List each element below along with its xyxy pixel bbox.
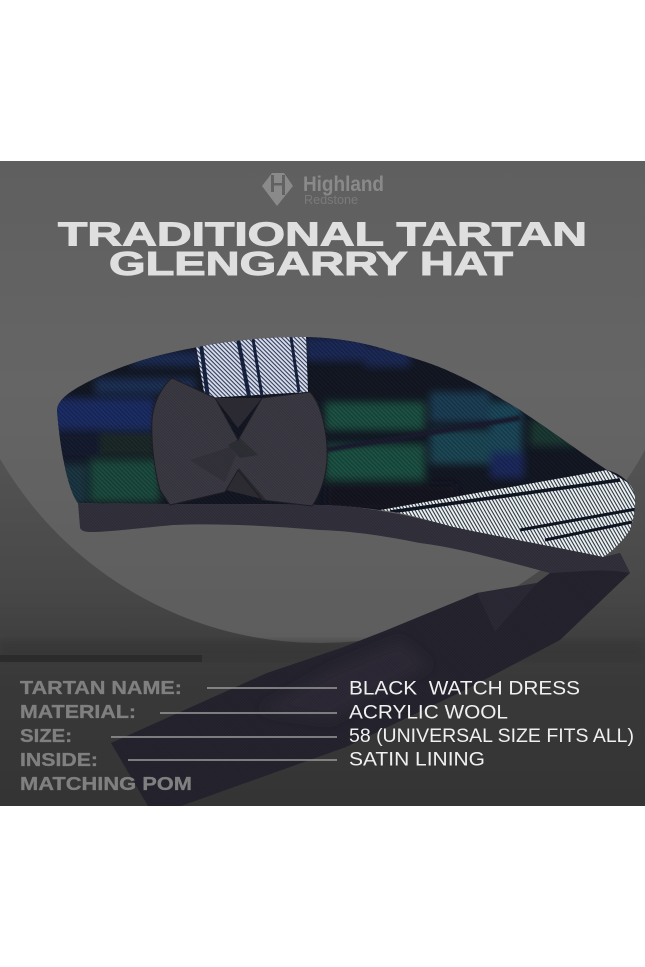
white stripe right <box>380 470 640 560</box>
hat crown tartan <box>57 337 636 557</box>
spec values <box>349 678 634 770</box>
connector lines <box>111 688 337 760</box>
panel: grey background <box>0 161 645 806</box>
hat band <box>78 503 630 573</box>
spec labels <box>20 677 192 794</box>
bow <box>152 378 327 506</box>
spec values: SATIN LINING <box>349 750 485 770</box>
logo: Highland Redstone: Highland <box>303 173 384 196</box>
spec labels: SIZE: <box>20 725 72 746</box>
title <box>58 222 584 276</box>
spec labels: MATCHING POM <box>20 773 192 794</box>
logo: Highland Redstone: Redstone <box>304 193 358 207</box>
logo: Highland Redstone <box>262 173 384 207</box>
white stripe top <box>195 335 308 398</box>
title: TRADITIONAL TARTAN <box>58 216 587 254</box>
spec values: BLACK WATCH DRESS <box>349 678 580 700</box>
spec values: 58 (UNIVERSAL SIZE FITS ALL) <box>349 726 634 747</box>
hat tail ribbon <box>111 553 630 806</box>
spec labels: MATERIAL: <box>20 701 136 722</box>
spec labels: INSIDE: <box>20 749 98 770</box>
title: GLENGARRY HAT <box>109 246 514 283</box>
decorative bar <box>0 655 202 662</box>
spec values: ACRYLIC WOOL <box>349 702 508 724</box>
spec labels: TARTAN NAME: <box>20 677 182 698</box>
